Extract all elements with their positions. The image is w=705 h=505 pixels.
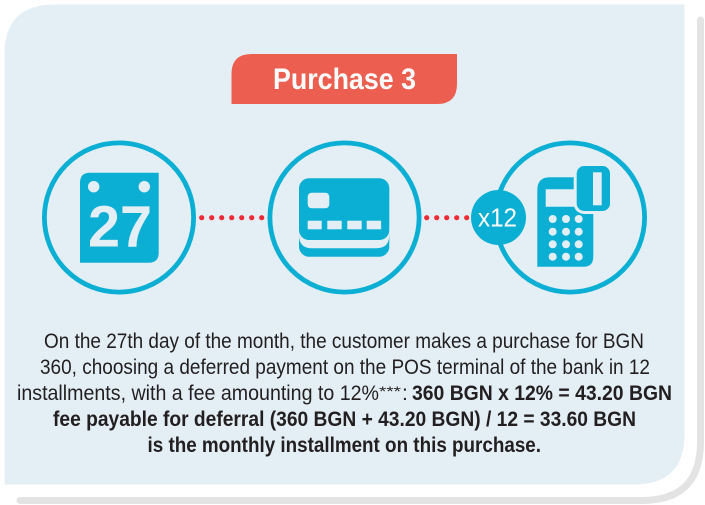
text block: explanation <box>17 330 672 457</box>
icon: POS terminal <box>495 143 645 292</box>
text block: explanation: *** <box>379 383 402 399</box>
text block: explanation: 360, choosing a deferred payment on the POS terminal of the bank in 12 <box>40 356 650 379</box>
text block: explanation: On the 27th day of the month, the customer makes a purchase for BGN <box>44 330 644 353</box>
heading: Purchase 3: Purchase 3 <box>273 63 416 96</box>
text block: explanation: installments, with a fee amounting to 12% <box>17 382 379 405</box>
text block: explanation: is the monthly installment on this purchase. <box>148 434 541 457</box>
dotted connector: card to terminal <box>424 215 469 220</box>
badge: x12 installments: x12 <box>478 203 517 233</box>
icon: calendar day 27 <box>44 143 194 292</box>
dotted connector: calendar to card <box>199 215 264 220</box>
text block: explanation: fee payable for deferral (360 BGN + 43.20 BGN) / 12 = 33.60 BGN <box>53 408 636 431</box>
icon: bank card <box>270 143 419 292</box>
text block: explanation: 360 BGN x 12% = 43.20 BGN <box>412 382 672 405</box>
text block: explanation: : <box>402 382 408 405</box>
icon: calendar day 27: 27 <box>88 195 152 260</box>
heading: Purchase 3 <box>232 54 457 104</box>
badge: x12 installments <box>471 190 526 245</box>
